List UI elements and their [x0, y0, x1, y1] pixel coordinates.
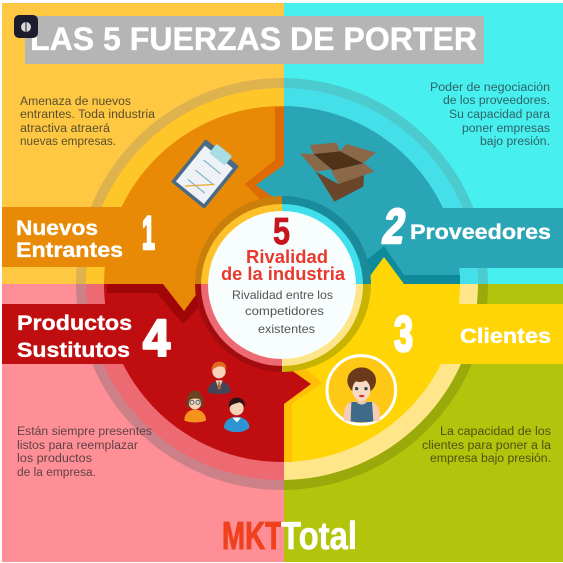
center text [221, 211, 346, 336]
center text: existentes [258, 322, 315, 336]
center text: 5 [273, 211, 290, 253]
logo: MKT [222, 515, 282, 558]
heading: productos sustitutos: Sustitutos [17, 339, 130, 362]
number 3: 3 [394, 306, 413, 362]
text: clientes description: La capacidad de los [440, 426, 551, 438]
panel: teal quadrant, Proveedores [256, 106, 563, 284]
center text: de la industria [221, 264, 346, 284]
panel: orange quadrant, Nuevos Entrantes [2, 106, 284, 284]
heading: proveedores: Proveedores [410, 221, 551, 244]
panel: red quadrant, Productos Sustitutos [2, 284, 311, 462]
person: woman with glasses [184, 391, 206, 422]
text: proveedores description: bajo presión. [480, 136, 550, 148]
heading: nuevos entrantes: Entrantes [16, 239, 123, 262]
text: proveedores description: Poder de negociación [430, 82, 550, 94]
text: nuevos entrantes description: Amenaza de nuevos [20, 96, 131, 108]
logo [222, 515, 357, 558]
outer rings [76, 78, 488, 490]
icon: three people [184, 362, 249, 432]
person: man in blue [224, 398, 249, 432]
text: proveedores description: Su capacidad para [449, 109, 551, 121]
title: LAS 5 FUERZAS DE PORTER [30, 21, 477, 57]
text: productos sustitutos description: listos para reemplazar [17, 440, 138, 452]
center text: Rivalidad entre los [232, 288, 333, 302]
text: clientes description: clientes para poner a la [422, 440, 552, 452]
text: clientes description: empresa bajo presión. [430, 453, 551, 465]
center ring [195, 196, 371, 372]
number 2: 2 [379, 199, 410, 254]
icon: cardboard box [300, 143, 376, 202]
heading: clientes: Clientes [460, 325, 551, 348]
panel: yellow quadrant, Clientes [284, 257, 563, 462]
number 4: 4 [143, 310, 170, 368]
text: productos sustitutos description: los productos [17, 453, 92, 465]
heading: productos sustitutos: Productos [17, 312, 132, 335]
text: nuevos entrantes description: nuevas empresas. [20, 136, 116, 148]
text: nuevos entrantes description: atractiva atraerá [20, 123, 111, 135]
logo: Total [281, 515, 357, 558]
person: man in suit [208, 362, 231, 394]
icon: clipboard [171, 136, 241, 209]
text: productos sustitutos description: de la empresa. [17, 467, 96, 479]
center text: Rivalidad [246, 247, 328, 267]
text: productos sustitutos description: Están siempre presentes [17, 426, 152, 438]
icon: badge [14, 15, 38, 38]
text: proveedores description: poner empresas [462, 123, 550, 135]
icon: woman medallion [327, 356, 396, 424]
text: nuevos entrantes description: entrantes. Toda industria [20, 109, 156, 121]
text: 1 [142, 206, 155, 259]
center text: competidores [245, 304, 324, 318]
heading: nuevos entrantes: Nuevos [16, 217, 98, 240]
text: proveedores description: de los proveedores. [443, 95, 550, 107]
